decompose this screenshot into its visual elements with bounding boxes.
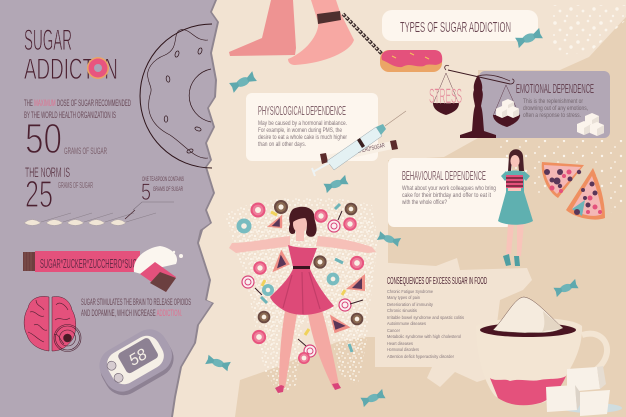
pale blotch behind consequences [375, 258, 532, 387]
infographic canvas: GRAMS OF SUGAR [58, 181, 93, 190]
heading box: types of sugar addiction [382, 10, 538, 41]
background darker area [235, 17, 626, 417]
icon: sugar cubes [577, 113, 604, 136]
heading box: types of sugar addiction: TYPES OF SUGAR ADDICTION [400, 19, 511, 36]
illustration: woman lying in sugar [229, 207, 376, 393]
text: consequences list: Chronic Fatigue Syndrome [387, 289, 433, 295]
icon: sugar cubes by cup [546, 366, 622, 416]
icon: sugar packet: SUGAR*ZUCKER*ZUCCHERO*SUG [40, 256, 137, 271]
panel: emotional dependence [479, 71, 610, 138]
icon: chained donut [380, 50, 442, 72]
panel: emotional dependence: often a response to stress. [523, 113, 581, 119]
stat: norm 25: THE NORM IS [25, 164, 70, 180]
panel: behavioural dependence: BEHAVIOURAL DEPENDENCE [402, 169, 486, 183]
icon: syringe with sugar stick [312, 111, 406, 176]
icon: scales with stress and sugar: STRESS [429, 85, 462, 108]
stat: teaspoon 5 [133, 177, 184, 210]
icon: glucose meter [92, 323, 181, 402]
left panel [0, 0, 217, 417]
panel: physiological dependence: PHYSIOLOGICAL DEPENDENCE [258, 104, 346, 118]
panel: emotional dependence: drowning out of any emotions, [523, 106, 588, 112]
text: maximum dose: THE MAXIMUM DOSE OF SUGAR RECOMMENDED [24, 98, 131, 108]
panel: physiological dependence: than on all other days. [258, 142, 306, 148]
sprinkle of sugar top right [550, 5, 626, 55]
stat: 50 grams [25, 115, 107, 163]
text: consequences list: Deterioration of immunity [387, 302, 434, 308]
donut outline illustration [140, 24, 212, 168]
stat: norm 25 [25, 164, 93, 216]
panel: emotional dependence: This is the replenishment or [523, 99, 583, 105]
panel: behavioural dependence: What about your work colleagues who bring [402, 186, 496, 192]
text: maximum dose: BY THE WORLD HEALTH ORGANIZATION IS [24, 110, 116, 120]
icon: glucose meter: 58 [126, 346, 150, 370]
infographic canvas: GRAMS OF SUGAR [64, 146, 107, 157]
panel: physiological dependence: May be caused by a hormonal imbalance. [258, 121, 347, 127]
icon: five spoons [24, 210, 156, 226]
text: consequences list: Cancer [387, 328, 400, 334]
icon: cup of coffee with sugar [476, 297, 607, 405]
icon: woman holding cake [498, 149, 533, 266]
stat: 50 grams: 50 [25, 115, 62, 163]
text: consequences list: Irritable bowel syndrome and spastic colitis [387, 315, 465, 321]
text: maximum dose [24, 98, 131, 120]
text: consequences list: Autoimmune diseases [387, 321, 426, 327]
icon: scales with stress and sugar [429, 65, 520, 138]
title: ADDICTI N [24, 53, 118, 86]
text: consequences list: Attention deficit hyperactivity disorder [387, 354, 454, 360]
candies [205, 28, 579, 407]
icon: title donut [87, 57, 109, 79]
text: consequences list: Metabolic syndrome with high cholesterol [387, 334, 461, 340]
icon: syringe with sugar stick: ZUCCHERO*SUGAR [349, 143, 386, 157]
icon: sugar packet [23, 246, 183, 292]
sweets around woman [236, 200, 365, 364]
stat: teaspoon 5: 5 [141, 179, 151, 206]
text: consequences list: Many types of pain [387, 295, 420, 301]
sugar scatter behind woman [224, 197, 378, 395]
sprinkle of sugar mid right [495, 140, 626, 215]
stat: teaspoon 5: ONE TEASPOON CONTAINS [142, 177, 184, 183]
panel: behavioural dependence: with the whole office? [401, 200, 448, 206]
panel: physiological dependence [246, 93, 378, 161]
text: brain stimulation [81, 297, 191, 318]
text: consequences list: Hormonal disorders [387, 347, 419, 353]
stat: norm 25: 25 [25, 174, 53, 216]
panel: behavioural dependence: cake for their birthday and offer to eat it [402, 193, 491, 199]
icon: pizza slices [542, 162, 605, 220]
text: consequences list [387, 276, 487, 360]
stat: teaspoon 5: GRAMS OF SUGAR [153, 186, 183, 193]
icon: feet with shackle [229, 0, 382, 65]
title [24, 24, 118, 86]
infographic canvas: CONSEQUENCES OF EXCESS SUGAR IN FOOD [387, 276, 487, 287]
icon: brain [24, 296, 81, 352]
left panel shadow edge [0, 0, 219, 417]
panel: physiological dependence: For example, in women during PMS, the [258, 128, 343, 134]
infographic canvas: SUGAR STIMULATES THE BRAIN TO RELEASE OPIOIDS [81, 297, 191, 307]
text: brain stimulation: AND DOPAMINE, WHICH INCREASE ADDICTION. [81, 308, 182, 318]
panel: behavioural dependence [388, 158, 512, 227]
title: SUGAR [24, 24, 72, 57]
text: consequences list: Chronic sinusitis [387, 308, 418, 314]
panel: physiological dependence: desire to eat a whole cake is much higher [258, 135, 347, 141]
chain [343, 14, 382, 54]
text: consequences list: Heart diseases [387, 341, 413, 347]
